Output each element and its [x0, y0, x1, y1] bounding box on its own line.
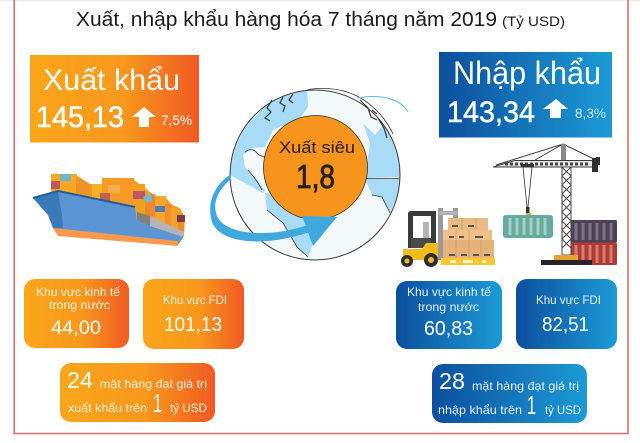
card: export items over 1 billion: [60, 363, 215, 422]
card: import items over 1 billion: mặt hàng đạt giá trị: [472, 379, 579, 393]
card: export domestic sector: [24, 279, 129, 348]
card: import domestic sector: [396, 281, 502, 349]
card: export items over 1 billion: xuất khẩu trên: [68, 401, 147, 415]
card: import items over 1 billion: [432, 364, 587, 423]
callout: trade surplus: Xuất siêu: [279, 138, 355, 157]
icon: crane and lifted container: [493, 144, 600, 265]
card: export FDI sector: [143, 279, 244, 349]
panel: import headline: 143,34: [447, 96, 535, 129]
card: import items over 1 billion: 28: [439, 368, 465, 394]
card: export items over 1 billion: tỷ USD: [170, 401, 207, 415]
icon: stacked containers: [570, 220, 617, 265]
card: import items over 1 billion: 1: [527, 390, 536, 420]
card: import FDI sector: Khu vực FDI: [536, 293, 601, 307]
title: (Tỷ USD): [502, 13, 565, 29]
card: export domestic sector: 44,00: [51, 318, 101, 339]
card: import FDI sector: [516, 279, 617, 349]
panel: export headline: [30, 55, 199, 142]
card: import domestic sector: trong nước: [418, 300, 479, 314]
card: import domestic sector: 60,83: [424, 318, 473, 340]
icon: forklift with boxes: [401, 208, 495, 267]
card: import items over 1 billion: nhập khẩu trên: [438, 403, 522, 417]
icon: globe with trade balance: [228, 86, 405, 260]
panel: export headline: 7,5%: [161, 112, 192, 128]
panel: export headline: Xuất khẩu: [43, 64, 180, 97]
card: import domestic sector: Khu vực kinh tế: [407, 285, 491, 299]
card: export items over 1 billion: mặt hàng đạt giá trị: [100, 377, 207, 391]
card: import items over 1 billion: tỷ USD: [545, 403, 581, 417]
card: import FDI sector: 82,51: [542, 314, 589, 336]
title: Xuất, nhập khẩu hàng hóa 7 tháng năm 2019: [76, 9, 497, 31]
icon: container ship: [33, 174, 185, 246]
card: export FDI sector: Khu vực FDI: [163, 293, 227, 307]
card: export items over 1 billion: 1: [153, 388, 162, 418]
panel: import headline: 8,3%: [575, 105, 606, 121]
panel: export headline: 145,13: [36, 101, 124, 134]
callout: trade surplus: 1,8: [296, 158, 335, 195]
card: export FDI sector: 101,13: [164, 314, 222, 336]
callout: trade surplus: [264, 116, 368, 220]
panel: import headline: Nhập khẩu: [453, 55, 601, 91]
card: export items over 1 billion: 24: [67, 367, 93, 393]
arrow: swoosh around globe: [210, 97, 408, 246]
card: export domestic sector: trong nước: [49, 298, 110, 312]
card: export domestic sector: Khu vực kinh tế: [36, 285, 120, 299]
panel: import headline: [439, 52, 612, 138]
